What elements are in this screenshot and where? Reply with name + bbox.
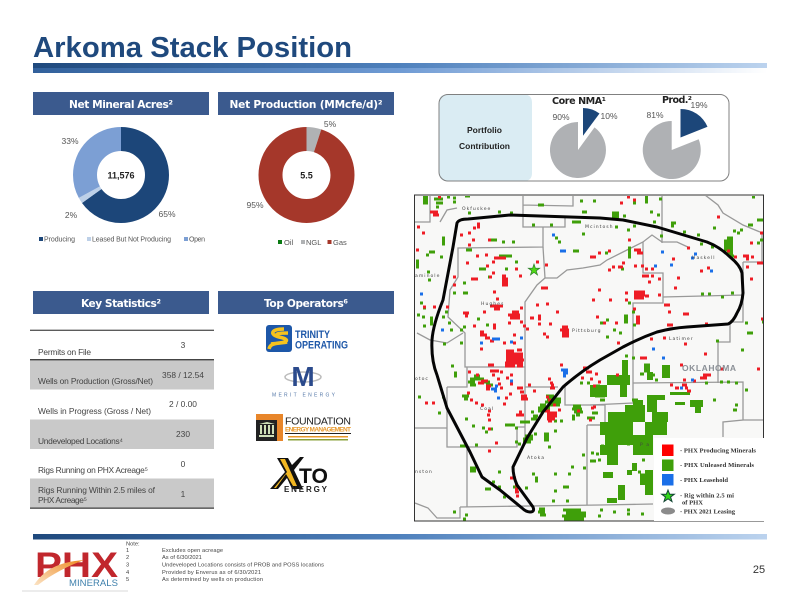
- percent labels: 5%: [324, 119, 337, 129]
- logo: XTO Energy: TO: [299, 465, 328, 488]
- county labels: P a: [640, 442, 650, 448]
- county labels: otoc: [415, 376, 429, 382]
- statistics table: PHX Acreage⁵: [38, 495, 87, 505]
- county labels: nston: [415, 469, 433, 475]
- heading: net production: [218, 92, 394, 115]
- map legend: - PHX Leasehold: [680, 477, 728, 484]
- panel: portfolio contribution: Contribution: [459, 141, 510, 151]
- logo: Merit Energy: M: [291, 361, 315, 392]
- contribution label: Portfolio: [467, 125, 502, 135]
- statistics table: [30, 330, 214, 509]
- footnotes: 3: [126, 562, 129, 568]
- map legend: - PHX Producing Minerals: [680, 448, 756, 454]
- acreage squares: [416, 196, 765, 519]
- statistics table: Wells on Production (Gross/Net): [38, 376, 153, 386]
- logo: Foundation Energy Management: [256, 414, 351, 441]
- percent labels: 2%: [65, 210, 78, 220]
- county labels: Haskell: [692, 255, 716, 261]
- legend: acres: Leased But Not Producing: [92, 236, 171, 244]
- logo: Foundation Energy Management: ENERGY MANAGEMENT: [285, 426, 351, 434]
- percent labels: [61, 136, 176, 220]
- donut centre value: 11,576: [107, 170, 135, 180]
- pie chart: production: 81%: [646, 110, 664, 120]
- map legend: [654, 438, 764, 521]
- logo: PHX Minerals: PHX: [35, 546, 119, 585]
- statistics table: 3: [181, 340, 186, 350]
- heading: key statistics: [33, 291, 209, 314]
- map legend: of PHX: [682, 500, 703, 506]
- county labels: Mcintosh: [585, 224, 614, 230]
- title: Arkoma Stack Position: [33, 32, 352, 64]
- heading: net production: Net Production (MMcfe/d)²: [230, 99, 383, 111]
- logo: Foundation Energy Management: FOUNDATION: [285, 416, 351, 428]
- logo: XTO Energy: [270, 457, 328, 494]
- footnotes: Excludes open acreage: [162, 548, 223, 554]
- heading: net mineral acres: Net Mineral Acres²: [69, 99, 173, 111]
- title rule: [33, 63, 767, 73]
- map panel: [414, 195, 765, 521]
- heading: key statistics: Key Statistics²: [81, 298, 161, 310]
- map legend: - Rig within 2.5 mi: [680, 492, 734, 500]
- statistics table: 230: [176, 429, 190, 439]
- pie chart: production: [643, 95, 708, 179]
- statistics table: 0: [181, 459, 186, 469]
- contribution frame: [439, 94, 729, 181]
- donut chart: net production: [270, 139, 342, 211]
- county labels: Pittsburg: [572, 328, 602, 334]
- heading: net mineral acres: [33, 92, 209, 115]
- legend: acres: Open: [189, 236, 205, 244]
- map legend: - PHX Unleased Minerals: [680, 462, 754, 469]
- percent labels: [246, 119, 337, 210]
- logo: Trinity Operating: TRINITY: [295, 329, 331, 341]
- legend: production: Oil: [284, 238, 294, 247]
- footnotes: As of 6/30/2021: [162, 555, 202, 561]
- panel: net mineral acres: [33, 92, 209, 244]
- logo: XTO Energy: ENERGY: [284, 485, 328, 494]
- stack outline: [432, 215, 743, 512]
- logo: Merit Energy: MERIT ENERGY: [272, 392, 336, 398]
- footnotes: Provided by Enverus as of 6/30/2021: [162, 570, 261, 576]
- donut chart: net mineral acres: [85, 139, 157, 211]
- logo: Merit Energy: [272, 361, 336, 398]
- percent labels: 65%: [158, 209, 176, 219]
- footnotes: As determined by wells on production: [162, 577, 263, 583]
- county labels: Hughes: [481, 301, 504, 307]
- producing minerals: red: [416, 197, 764, 496]
- statistics table: 358 / 12.54: [162, 370, 204, 380]
- heading: top operators: Top Operators⁶: [264, 298, 348, 310]
- footnotes: 1: [126, 548, 129, 554]
- footer rule: [33, 534, 767, 540]
- statistics table: Rigs Running Within 2.5 miles of: [38, 485, 156, 495]
- county labels: OKLAHOMA: [682, 363, 736, 373]
- footnotes: [126, 542, 324, 583]
- county labels: Coal: [480, 406, 494, 412]
- heading: top operators: [218, 291, 394, 314]
- county boundaries: [415, 195, 763, 518]
- county labels: Okfuskee: [462, 206, 491, 212]
- map legend: - PHX 2021 Leasing: [680, 508, 736, 516]
- donut centre value: 5.5: [300, 170, 313, 180]
- statistics table: Rigs Running on PHX Acreage⁵: [38, 465, 148, 475]
- legend: acres: [39, 236, 205, 244]
- footnotes: 4: [126, 570, 129, 576]
- statistics table: Undeveloped Locations⁴: [38, 436, 123, 446]
- panel: top operators: [218, 291, 394, 494]
- pie chart: production: Prod.²: [662, 95, 692, 106]
- map base: [414, 195, 764, 521]
- percent labels: 95%: [246, 200, 264, 210]
- legend: production: Gas: [333, 238, 347, 247]
- pie chart: core NMA: [550, 96, 618, 178]
- county labels: aminole: [415, 273, 440, 279]
- panel: net production: [218, 92, 394, 247]
- legend: acres: Producing: [44, 236, 75, 244]
- legend: production: [278, 238, 347, 247]
- logo: PHX Minerals: MINERALS: [69, 578, 118, 589]
- leasehold: blue: [420, 235, 713, 398]
- statistics table: 2 / 0.00: [169, 399, 197, 409]
- footnotes: Undeveloped Locations consists of PROB and POSS locations: [162, 562, 324, 568]
- unleased minerals: green: [416, 196, 765, 519]
- footnotes: Note:: [126, 542, 140, 548]
- statistics table: Permits on File: [38, 347, 91, 357]
- percent labels: 33%: [61, 136, 79, 146]
- footnotes: 2: [126, 555, 129, 561]
- pie chart: core NMA: 10%: [600, 111, 618, 121]
- page number: 25: [753, 564, 765, 576]
- panel: portfolio contribution: [439, 94, 729, 181]
- panel: key statistics: [30, 291, 214, 509]
- pie chart: core NMA: Core NMA¹: [552, 96, 606, 107]
- rig star marker: [528, 264, 540, 275]
- pie chart: production: 19%: [690, 100, 708, 110]
- county labels: [415, 206, 736, 475]
- logo: Trinity Operating: [266, 325, 348, 352]
- pie chart: core NMA: 90%: [552, 112, 570, 122]
- county labels: Latimer: [669, 336, 694, 342]
- legend: production: NGL: [306, 238, 321, 247]
- statistics table: Wells in Progress (Gross / Net): [38, 406, 151, 416]
- footnotes: 5: [126, 577, 129, 583]
- logo: Trinity Operating: OPERATING: [295, 340, 348, 352]
- statistics table: 1: [181, 489, 186, 499]
- logo: PHX Minerals: [22, 541, 128, 592]
- county labels: Atoka: [527, 455, 545, 461]
